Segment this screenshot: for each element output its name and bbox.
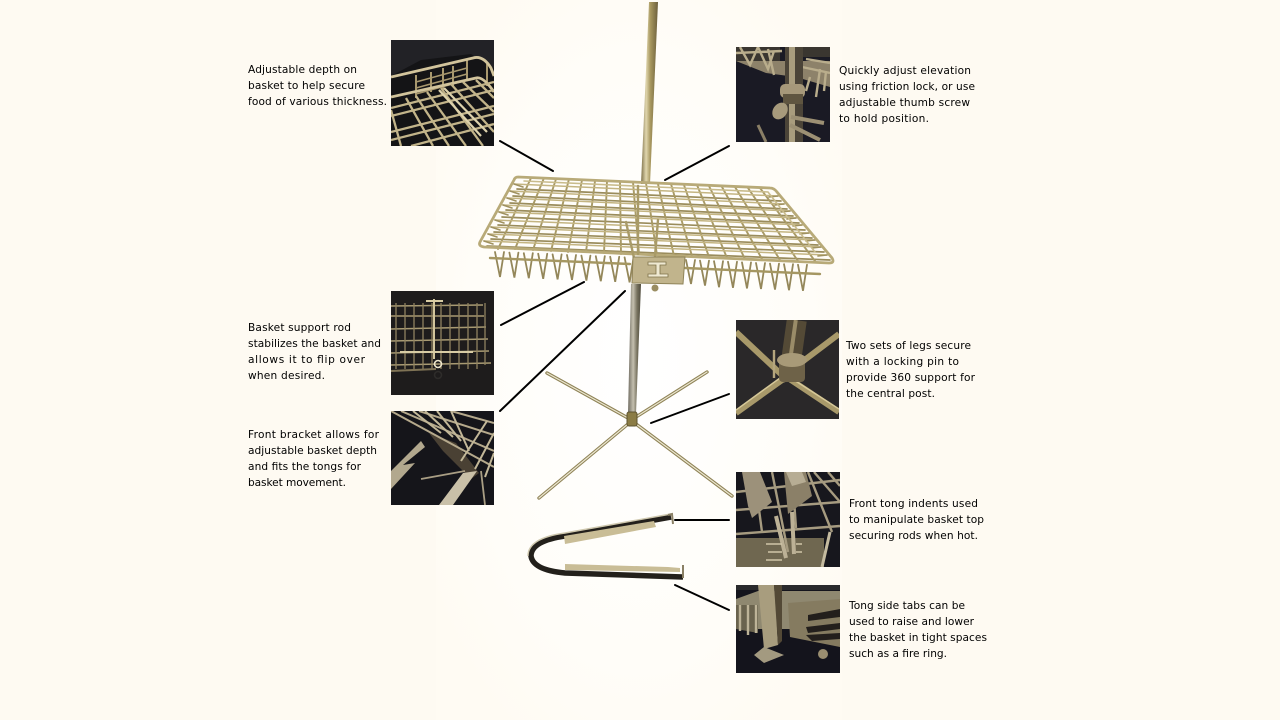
text: front bracket: and fits the tongs for — [248, 461, 362, 473]
text: basket support rod: Basket support rod — [248, 322, 351, 334]
text: basket support rod: when desired. — [248, 370, 325, 382]
text: front bracket: adjustable basket depth — [248, 445, 377, 457]
text: elevation adjustment: adjustable thumb screw — [839, 97, 970, 109]
basket long wires — [498, 178, 815, 261]
text: front bracket: Front bracket allows for — [248, 429, 380, 441]
photo: legs and locking pin — [736, 320, 839, 419]
leader lines — [500, 141, 729, 610]
basket rim — [480, 177, 833, 263]
text: legs: Two sets of legs secure — [845, 340, 971, 352]
text: tong side tabs: such as a fire ring. — [849, 648, 947, 660]
text: tong indents — [849, 498, 984, 542]
photo: tong side tabs — [736, 585, 840, 673]
text: adjustable depth: food of various thickness. — [248, 96, 387, 108]
text: tong indents: securing rods when hot. — [849, 530, 978, 542]
text: elevation adjustment: using friction lock, or use — [839, 81, 975, 93]
product: central post upper — [641, 2, 658, 184]
photo: front bracket — [391, 411, 494, 505]
basket hanging teeth — [495, 252, 807, 291]
text: legs — [845, 340, 976, 400]
text: elevation adjustment: Quickly adjust elevation — [839, 65, 971, 77]
text: adjustable depth: Adjustable depth on — [248, 64, 357, 76]
text: tong side tabs — [848, 600, 987, 660]
photo: basket support rod — [391, 291, 494, 395]
text: basket support rod: stabilizes the basket and — [248, 338, 381, 350]
text: front bracket — [248, 429, 380, 489]
text: adjustable depth — [248, 64, 387, 108]
product: central post lower — [628, 284, 641, 414]
product: wire basket — [480, 177, 833, 291]
text: tong indents: to manipulate basket top — [849, 514, 984, 526]
text: front bracket: basket movement. — [248, 477, 346, 489]
basket side wall struts — [484, 184, 827, 256]
product: tripod legs — [539, 372, 732, 498]
text: tong side tabs: used to raise and lower — [849, 616, 975, 628]
text: legs: the central post. — [846, 388, 935, 400]
text: adjustable depth: basket to help secure — [248, 80, 365, 92]
basket cross wires — [484, 184, 827, 255]
text: elevation adjustment: to hold position. — [839, 113, 929, 125]
text: legs: with a locking pin to — [846, 356, 959, 368]
product: front bracket — [632, 257, 685, 292]
basket floor wires — [487, 189, 830, 260]
text: basket support rod: allows it to flip over — [248, 354, 366, 366]
text: tong side tabs: Tong side tabs can be — [848, 600, 965, 612]
text: tong indents: Front tong indents used — [849, 498, 978, 510]
photo: adjustable basket depth — [391, 40, 494, 146]
text: legs: provide 360 support for — [846, 372, 976, 384]
support rod — [626, 186, 658, 258]
text: tong side tabs: the basket in tight spaces — [849, 632, 987, 644]
photo: front tong indents — [736, 472, 840, 567]
product: tongs — [528, 514, 683, 578]
photo: friction lock — [736, 47, 830, 142]
text: basket support rod — [248, 322, 381, 382]
text: elevation adjustment — [839, 65, 975, 125]
